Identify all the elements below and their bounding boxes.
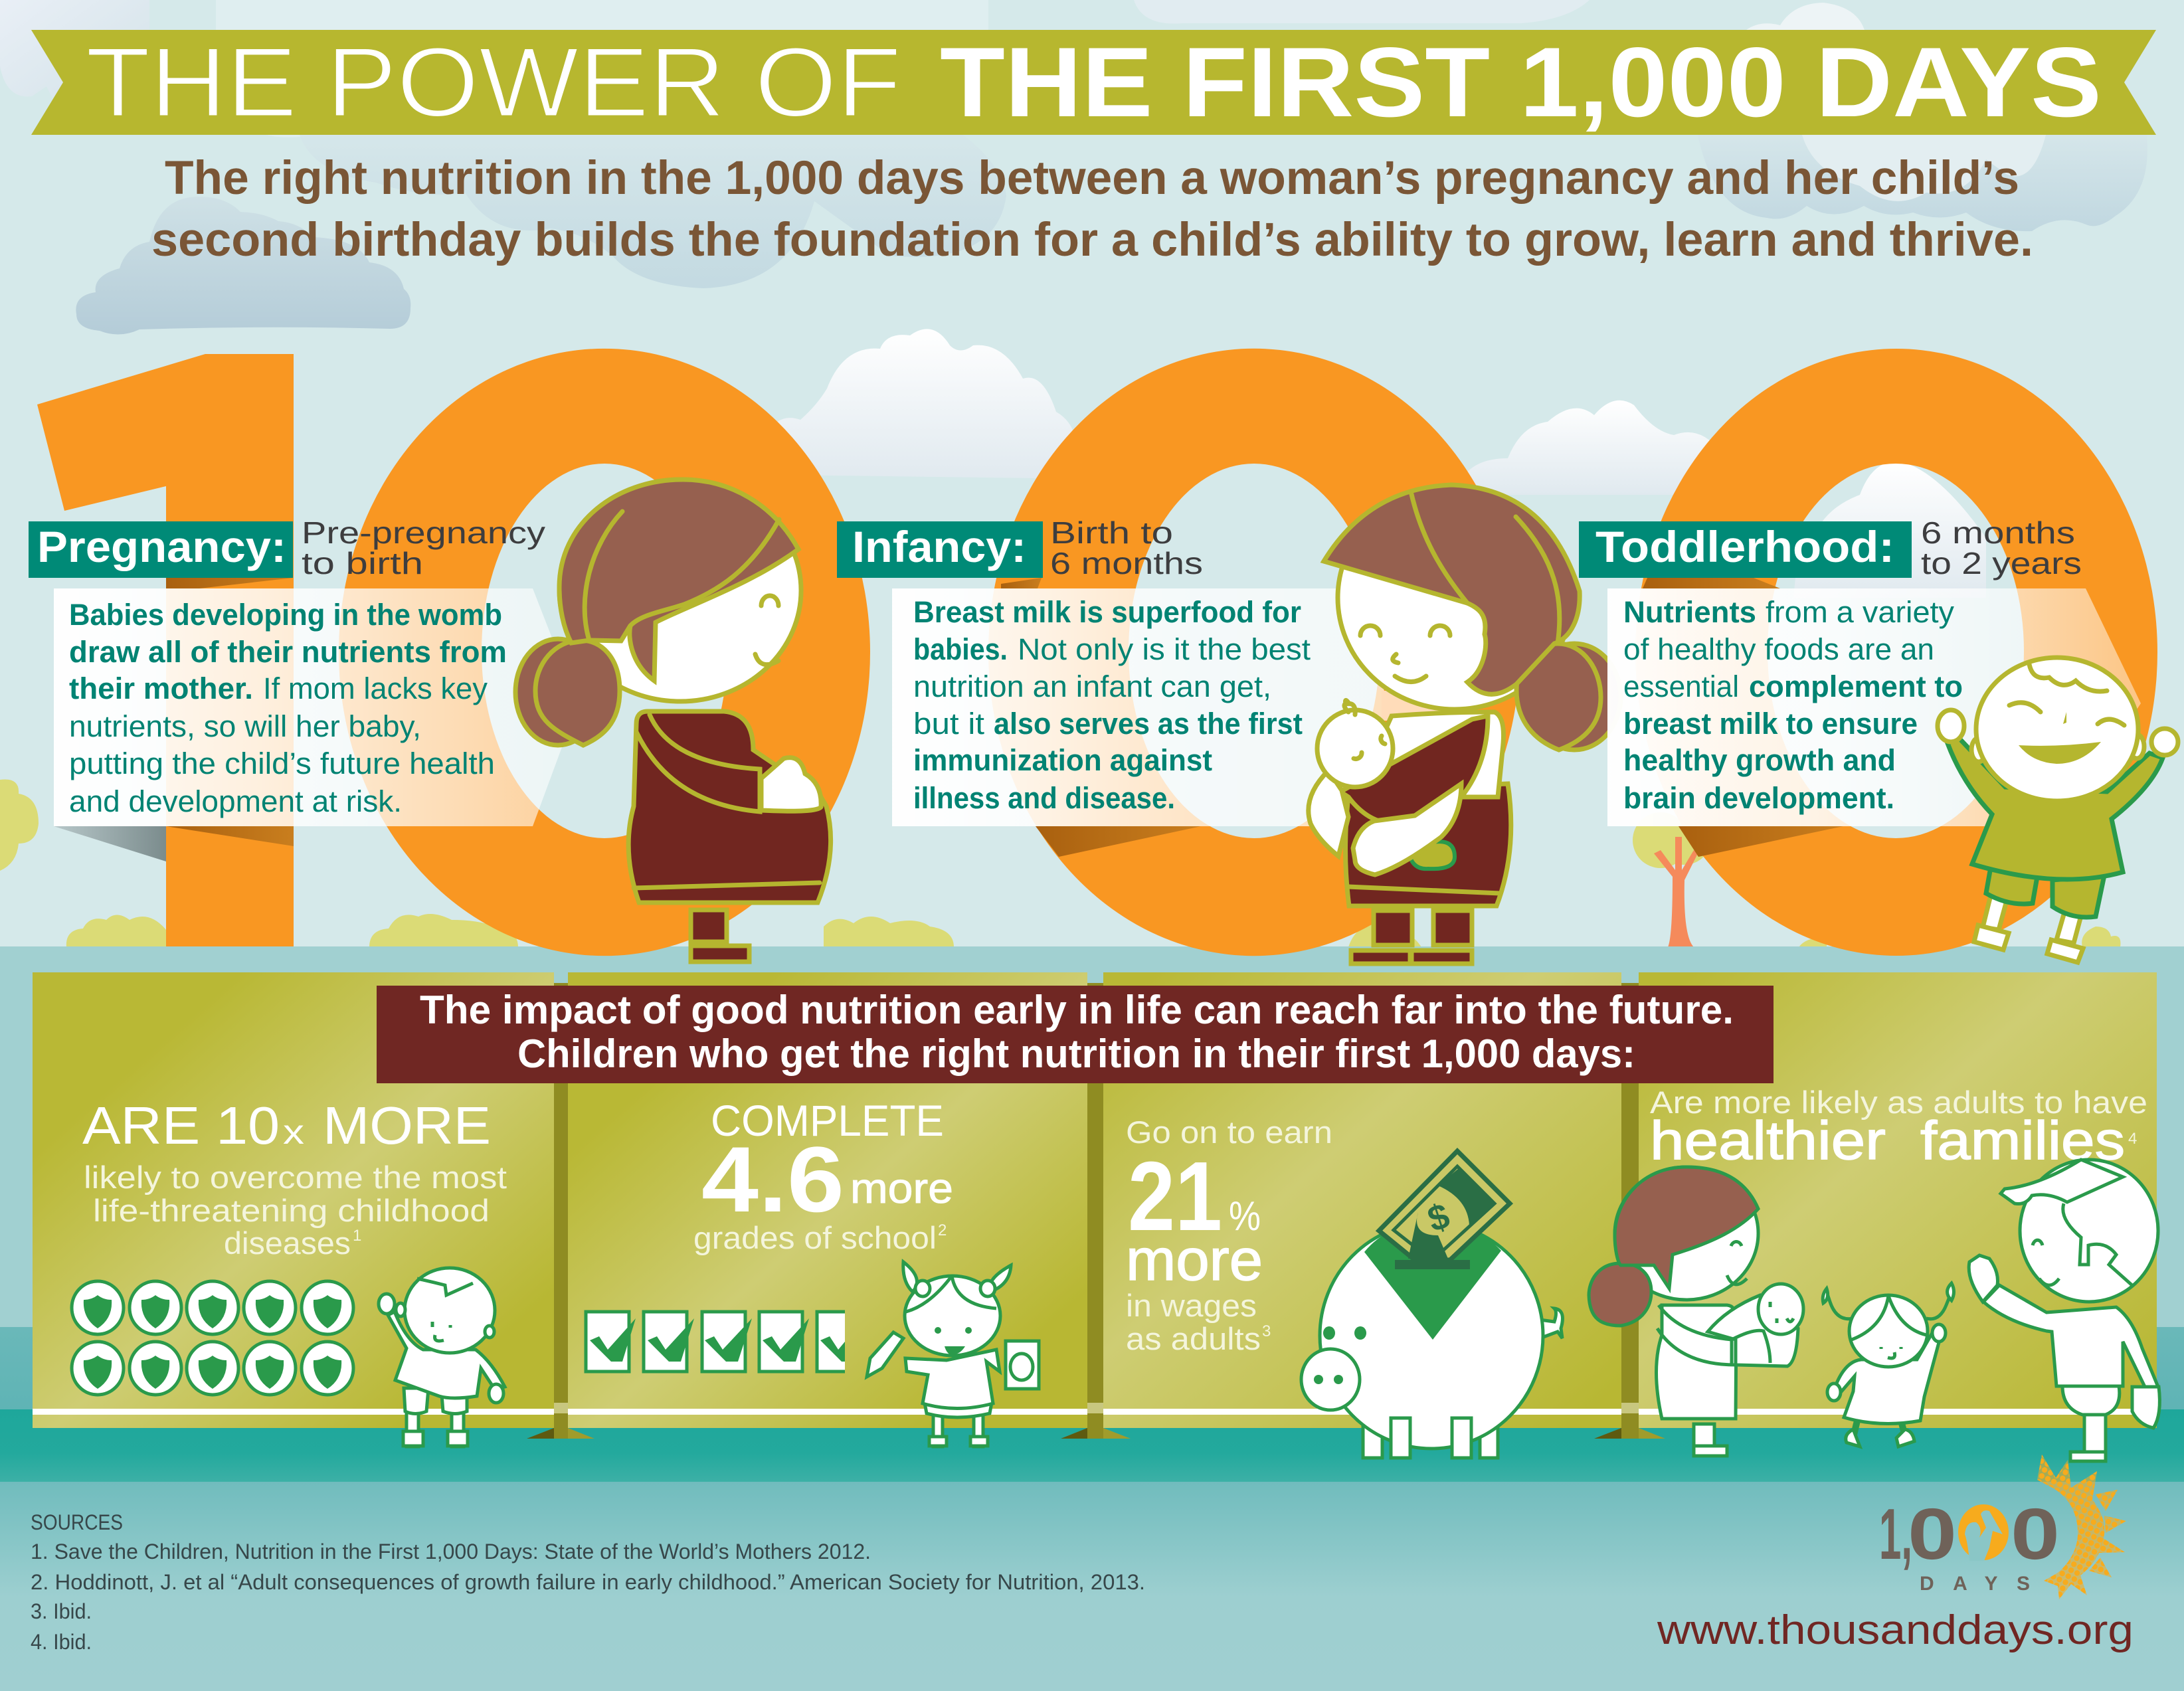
back legs bbox=[1363, 1418, 1498, 1458]
logo numerals bbox=[1879, 1494, 2060, 1575]
tail bbox=[1530, 1308, 1562, 1342]
big orange 1000 numeral bbox=[37, 349, 2157, 956]
board background bbox=[568, 972, 1087, 1428]
body text: nutrition an infant can get, bbox=[913, 669, 1271, 703]
body text: but it bbox=[913, 707, 985, 741]
body text: complement to bbox=[1749, 669, 1963, 703]
headline bbox=[701, 1096, 953, 1231]
holding arm bbox=[1353, 784, 1461, 875]
age range: 6 months bbox=[1921, 515, 2075, 550]
shorts bbox=[1986, 863, 2104, 917]
sources: 1. Save the Children, Nutrition in the First 1,000 Days: State of the World’s Mothers 2012. bbox=[31, 1540, 871, 1563]
description: grades of school bbox=[693, 1220, 937, 1255]
text: families bbox=[1920, 1111, 2125, 1171]
headline: x bbox=[283, 1113, 304, 1152]
age range bbox=[1050, 515, 1203, 580]
description: life-threatening childhood bbox=[93, 1193, 490, 1228]
website url: www.thousanddays.org bbox=[1657, 1607, 2134, 1653]
text panel background bbox=[1607, 588, 2141, 826]
description bbox=[84, 1160, 507, 1261]
description: likely to overcome the most bbox=[84, 1160, 507, 1195]
maroon impact banner bbox=[377, 986, 1774, 1083]
banner text bbox=[420, 988, 1734, 1076]
body text bbox=[1623, 595, 1963, 815]
dress bbox=[628, 711, 831, 903]
digit 0 second bbox=[988, 349, 1520, 956]
logo numerals: 0 bbox=[1908, 1494, 1957, 1575]
body text: from a variety bbox=[1766, 595, 1955, 629]
white clouds bbox=[752, 329, 1986, 598]
neck bbox=[1382, 691, 1468, 721]
leg bbox=[2062, 1386, 2120, 1461]
stripe bbox=[1639, 1409, 2157, 1415]
character: waving boy bbox=[379, 1268, 505, 1447]
age range: to 2 years bbox=[1921, 546, 2082, 580]
logo orange zero bbox=[1958, 1504, 2009, 1560]
panel shadow bbox=[54, 826, 294, 861]
panel: healthier families bbox=[1589, 972, 2159, 1461]
title banner bbox=[31, 27, 2156, 137]
pigtails bbox=[903, 1262, 1011, 1292]
description: 1 bbox=[353, 1227, 361, 1245]
body text: healthy growth and bbox=[1623, 743, 1896, 777]
shirt bbox=[1948, 739, 2163, 879]
head bbox=[1976, 658, 2138, 801]
panel: complete 4.6 more bbox=[568, 972, 1087, 1447]
board background bbox=[1639, 972, 2157, 1428]
eyes bbox=[1323, 1326, 1366, 1340]
body text: nutrients, so will her baby, bbox=[69, 709, 421, 743]
character: breastfeeding mother bbox=[1309, 485, 1621, 964]
banner text: Children who get the right nutrition in their first 1,000 days: bbox=[517, 1031, 1635, 1076]
panel: toddlerhood bbox=[1579, 515, 2141, 857]
hair and face bbox=[906, 1276, 996, 1355]
subtitle bbox=[151, 152, 2033, 266]
body text: If mom lacks key bbox=[263, 671, 488, 705]
panel: pregnancy bbox=[29, 515, 578, 861]
hair strands bbox=[585, 511, 779, 640]
digit 0 third bbox=[1635, 349, 2157, 956]
digit 1 bbox=[37, 354, 294, 946]
front legs bbox=[1391, 1418, 1471, 1458]
feet bbox=[1846, 1429, 1914, 1447]
hair and face bbox=[1850, 1296, 1926, 1358]
sources: 2. Hoddinott, J. et al “Adult consequences of growth failure in early childhood.” American Society for Nutrition, 2013. bbox=[31, 1570, 1145, 1594]
logo numerals: 1, bbox=[1879, 1494, 1912, 1575]
water bands bbox=[0, 1327, 2184, 1691]
head bbox=[1338, 486, 1572, 709]
icon: shields bbox=[72, 1281, 353, 1395]
arm lines bbox=[634, 715, 820, 888]
body text: draw all of their nutrients from bbox=[69, 635, 507, 669]
baby head bbox=[1758, 1284, 1803, 1334]
head bbox=[905, 1276, 1000, 1356]
pencil bbox=[867, 1332, 903, 1377]
hair bbox=[559, 480, 798, 681]
age range bbox=[1921, 515, 2082, 580]
title text: THE POWER OF bbox=[86, 27, 901, 137]
character: daughter bbox=[1823, 1283, 1954, 1447]
icon: piggy bank bbox=[1301, 1151, 1562, 1458]
arm lines bbox=[1657, 1305, 1770, 1365]
dress bbox=[905, 1350, 1000, 1408]
shirt and arms bbox=[1983, 1285, 2158, 1388]
digit 0 first bbox=[339, 349, 870, 956]
body text: Not only is it the best bbox=[1018, 632, 1311, 666]
character: mother with baby bbox=[1589, 1167, 1803, 1456]
silhouette of parent and child bbox=[1965, 1510, 2003, 1561]
panel shadow bbox=[1679, 826, 1843, 857]
text: 3 bbox=[1262, 1322, 1271, 1340]
hair and face bbox=[417, 1279, 473, 1341]
green back bbox=[1364, 1223, 1501, 1340]
sources bbox=[31, 1510, 1145, 1654]
head bbox=[1615, 1167, 1758, 1300]
hair bun bbox=[1516, 644, 1621, 750]
legs bbox=[403, 1388, 468, 1447]
sky background bbox=[0, 0, 2184, 947]
description: 2 bbox=[938, 1221, 947, 1239]
icon: check boxes bbox=[586, 1312, 845, 1372]
panel: 21 percent more bbox=[1103, 972, 1621, 1458]
character: pregnant woman bbox=[515, 480, 831, 962]
text: Go on to earn bbox=[1126, 1114, 1332, 1150]
bushes and trees bbox=[0, 779, 2120, 947]
torso bbox=[1355, 712, 1504, 797]
sources: SOURCES bbox=[31, 1510, 123, 1534]
sources: 3. Ibid. bbox=[31, 1599, 92, 1623]
hair bbox=[2001, 1160, 2123, 1203]
ribbon bbox=[1579, 521, 1912, 578]
logo word days: DAYS bbox=[1920, 1573, 2030, 1595]
body text bbox=[69, 598, 507, 818]
face bbox=[2009, 703, 2124, 725]
headline: COMPLETE bbox=[711, 1096, 944, 1145]
dress and arms bbox=[1833, 1332, 1941, 1423]
hair strands bbox=[1411, 491, 1560, 644]
hands bbox=[1938, 710, 2178, 762]
body text: illness and disease. bbox=[913, 781, 1175, 815]
baby bundle bbox=[1708, 1295, 1798, 1366]
headline: MORE bbox=[323, 1096, 491, 1155]
ribbon title: Pregnancy: bbox=[37, 522, 286, 571]
hair bun bbox=[1589, 1263, 1651, 1326]
title text bbox=[86, 27, 2102, 137]
body text: Breast milk is superfood for bbox=[913, 595, 1301, 629]
body text: also serves as the first bbox=[994, 707, 1303, 741]
body text: Nutrients bbox=[1623, 595, 1756, 629]
headline bbox=[82, 1096, 491, 1155]
legs bbox=[1854, 1418, 1905, 1436]
ground band bbox=[0, 946, 2184, 1328]
banner text: The impact of good nutrition early in life can reach far into the future. bbox=[420, 988, 1734, 1032]
ribbon shadow bbox=[1001, 578, 1042, 588]
age range bbox=[302, 515, 545, 580]
legs bbox=[925, 1403, 992, 1447]
character: toddler bbox=[1938, 658, 2178, 962]
snout bbox=[1301, 1349, 1360, 1410]
body text: of healthy foods are an bbox=[1623, 632, 1934, 666]
ribbon shadow bbox=[1643, 578, 1780, 588]
body text: brain development. bbox=[1623, 781, 1894, 815]
legs bbox=[1974, 890, 2083, 962]
text: in wages bbox=[1126, 1288, 1257, 1323]
face and ear bbox=[2033, 1203, 2134, 1287]
age range: Pre-pregnancy bbox=[302, 515, 545, 550]
board supports bbox=[527, 983, 1665, 1439]
body text: immunization against bbox=[913, 743, 1212, 777]
skirt bbox=[1346, 784, 1511, 906]
face bbox=[1727, 1241, 1747, 1285]
baby bbox=[1317, 700, 1393, 787]
headline: ARE 10 bbox=[82, 1096, 280, 1155]
body text: their mother. bbox=[69, 671, 253, 705]
panel: infancy bbox=[837, 515, 1388, 857]
head bbox=[405, 1268, 495, 1353]
head bbox=[2020, 1160, 2158, 1302]
legs bbox=[691, 910, 749, 962]
dollar bill bbox=[1379, 1151, 1510, 1260]
body text: Babies developing in the womb bbox=[69, 598, 502, 632]
ribbon bbox=[29, 521, 293, 578]
hair bbox=[2029, 664, 2107, 691]
ribbon bbox=[837, 521, 1043, 578]
age range: Birth to bbox=[1050, 515, 1173, 550]
stripe bbox=[1103, 1409, 1621, 1415]
panel shadow bbox=[1036, 826, 1201, 857]
text panel background bbox=[892, 588, 1388, 826]
body text: babies. bbox=[913, 632, 1008, 666]
logo numerals: 0 bbox=[2011, 1494, 2060, 1575]
description: diseases bbox=[224, 1225, 351, 1261]
age range: to birth bbox=[302, 546, 423, 580]
face bbox=[1360, 626, 1450, 681]
body text: essential bbox=[1623, 669, 1739, 703]
board background bbox=[1103, 972, 1621, 1428]
subtitle: The right nutrition in the 1,000 days between a woman’s pregnancy and her child’s bbox=[165, 152, 2019, 205]
face bbox=[755, 596, 778, 665]
body bbox=[1320, 1223, 1543, 1449]
headline: 4.6 bbox=[701, 1127, 844, 1231]
icon: sun bbox=[2037, 1455, 2104, 1599]
sources: 4. Ibid. bbox=[31, 1630, 92, 1654]
text: as adults bbox=[1126, 1321, 1261, 1356]
text: 4 bbox=[2128, 1130, 2137, 1148]
hair bun bbox=[515, 639, 620, 745]
body text: and development at risk. bbox=[69, 784, 402, 818]
text: Are more likely as adults to have bbox=[1650, 1085, 2147, 1120]
stripe bbox=[33, 1409, 554, 1415]
support feet bbox=[527, 1428, 1665, 1439]
text: more bbox=[1126, 1227, 1263, 1292]
sling bbox=[1340, 716, 1488, 824]
far arm bbox=[1309, 770, 1348, 856]
body text: putting the child’s future health bbox=[69, 747, 495, 780]
hands bbox=[1827, 1324, 1946, 1401]
text: % bbox=[1229, 1194, 1261, 1239]
torso and arms bbox=[388, 1312, 505, 1398]
title text: THE FIRST 1,000 DAYS bbox=[940, 27, 2102, 137]
stripe bbox=[568, 1409, 1087, 1415]
logo: 1,000 days bbox=[1879, 1455, 2126, 1599]
hair bbox=[1615, 1167, 1758, 1289]
panel: are 10x more bbox=[33, 972, 554, 1447]
character: girl with pencil bbox=[867, 1262, 1039, 1447]
ribbon shadow bbox=[166, 578, 293, 588]
clipboard bbox=[1006, 1341, 1039, 1389]
sun rays bbox=[2089, 1490, 2126, 1577]
ribbon title: Toddlerhood: bbox=[1595, 522, 1894, 571]
pigtails bbox=[1827, 1289, 1953, 1319]
text: healthier bbox=[1650, 1111, 1886, 1171]
leg bbox=[1694, 1424, 1727, 1456]
character: father bbox=[1969, 1160, 2159, 1461]
age range: 6 months bbox=[1050, 546, 1203, 580]
body text bbox=[913, 595, 1311, 815]
subtitle: second birthday builds the foundation for a child’s ability to grow, learn and thrive. bbox=[151, 214, 2033, 266]
text: 21 bbox=[1128, 1142, 1222, 1251]
hands bbox=[379, 1294, 503, 1403]
text panel background bbox=[54, 588, 578, 826]
hands bbox=[1969, 1255, 2159, 1428]
clouds behind title bbox=[0, 0, 2147, 335]
headline: more bbox=[850, 1164, 953, 1212]
slot bbox=[1395, 1260, 1470, 1269]
dollar bill: $ bbox=[1423, 1196, 1454, 1240]
text bbox=[1650, 1085, 2147, 1171]
body text: breast milk to ensure bbox=[1623, 707, 1918, 741]
head bbox=[559, 480, 801, 701]
hair bbox=[1324, 485, 1580, 694]
text bbox=[1126, 1114, 1332, 1356]
hand bbox=[761, 758, 821, 811]
board background bbox=[33, 972, 554, 1428]
legs bbox=[1351, 911, 1472, 964]
ribbon title: Infancy: bbox=[852, 522, 1026, 571]
dress bbox=[1657, 1305, 1736, 1419]
head bbox=[1849, 1295, 1928, 1367]
baby bump bbox=[1408, 842, 1455, 869]
